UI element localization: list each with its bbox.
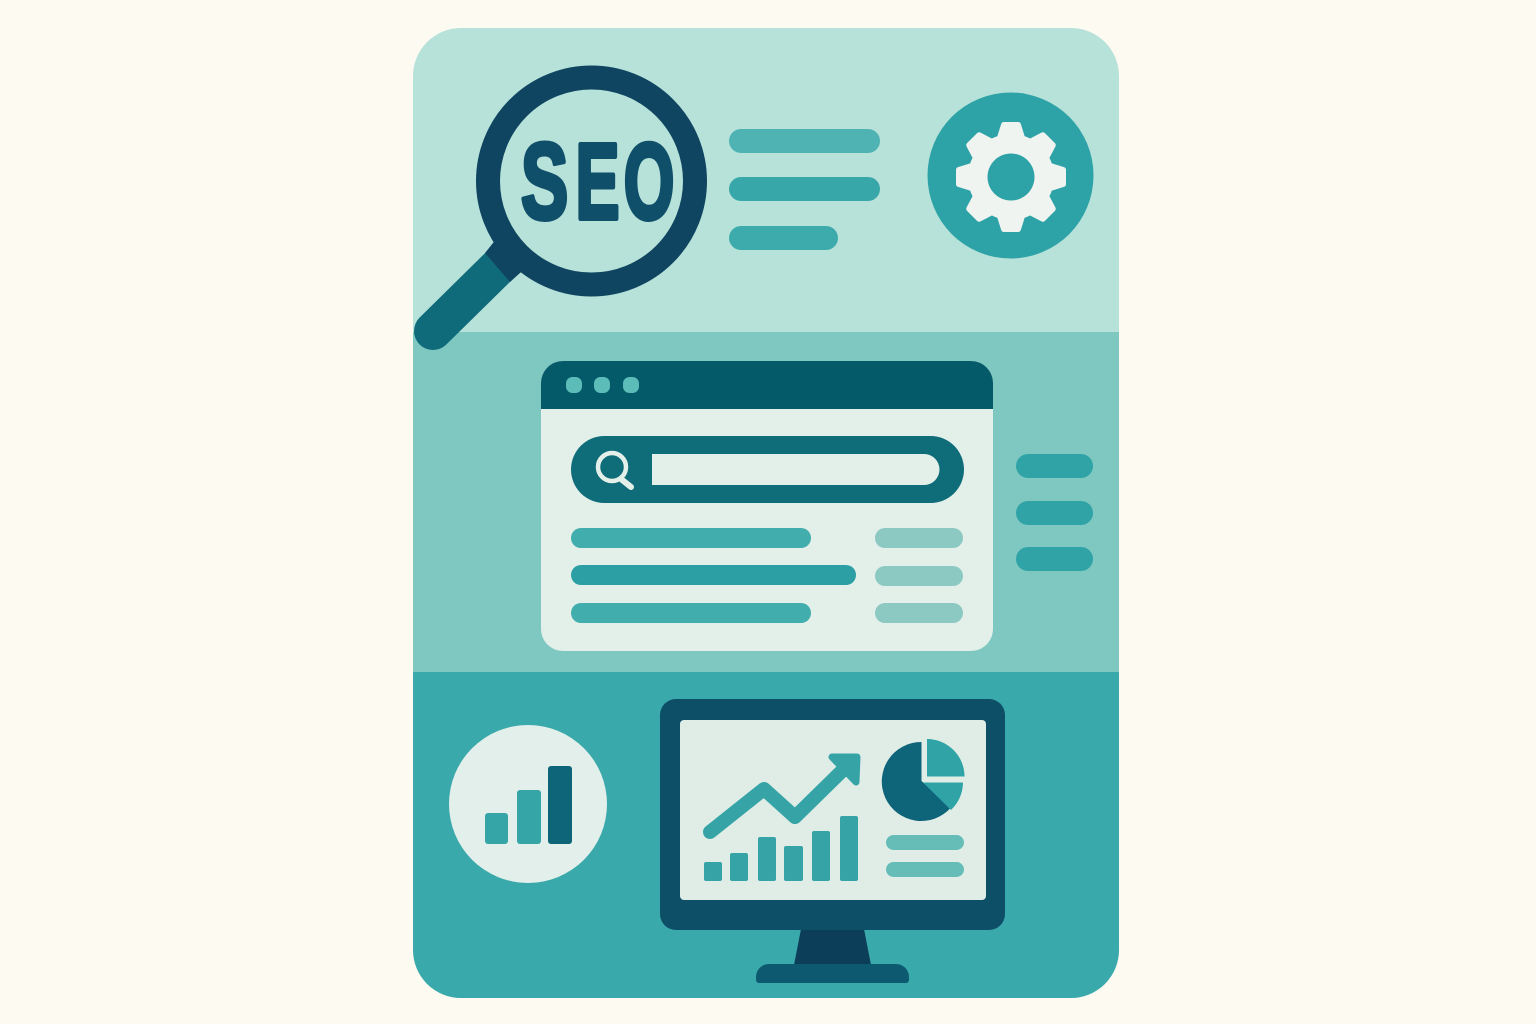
trend arrow bbox=[710, 757, 857, 832]
result tags bbox=[875, 528, 963, 623]
legend lines bbox=[886, 835, 964, 877]
gear cog bbox=[959, 125, 1063, 229]
text lines: top band bbox=[729, 129, 880, 250]
monitor screen bbox=[680, 720, 986, 900]
search bar bbox=[571, 436, 964, 503]
band: bottom bbox=[413, 672, 1119, 998]
browser body bbox=[541, 361, 993, 651]
magnifier collar bbox=[485, 230, 535, 282]
band: top bbox=[413, 28, 1119, 332]
SEO lettering: O bbox=[624, 120, 674, 242]
text lines: middle band bbox=[1016, 454, 1093, 571]
monitor base bbox=[756, 964, 909, 983]
result lines bbox=[571, 528, 856, 623]
icon: gear bbox=[928, 92, 1094, 258]
pie chart bbox=[882, 739, 964, 821]
icon: search bbox=[598, 453, 631, 487]
SEO lettering: E bbox=[576, 120, 620, 242]
SEO lettering: S bbox=[521, 120, 568, 242]
monitor stand bbox=[794, 929, 871, 965]
gear hole bbox=[988, 154, 1034, 200]
icon: bar chart badge bbox=[449, 725, 607, 883]
monitor frame bbox=[660, 699, 1005, 930]
card with three bands bbox=[413, 28, 1119, 998]
SEO lettering bbox=[521, 120, 674, 242]
monitor bbox=[660, 699, 1005, 983]
band: middle bbox=[413, 332, 1119, 672]
magnifier ring bbox=[488, 78, 695, 284]
browser window bbox=[541, 361, 993, 651]
icon: SEO magnifying glass bbox=[433, 78, 695, 331]
magnifier handle bbox=[433, 267, 498, 331]
window dots bbox=[566, 377, 639, 393]
browser title bar bbox=[541, 361, 993, 409]
gear badge bbox=[928, 92, 1094, 258]
column chart bbox=[704, 816, 858, 881]
infographic canvas bbox=[413, 28, 1119, 998]
